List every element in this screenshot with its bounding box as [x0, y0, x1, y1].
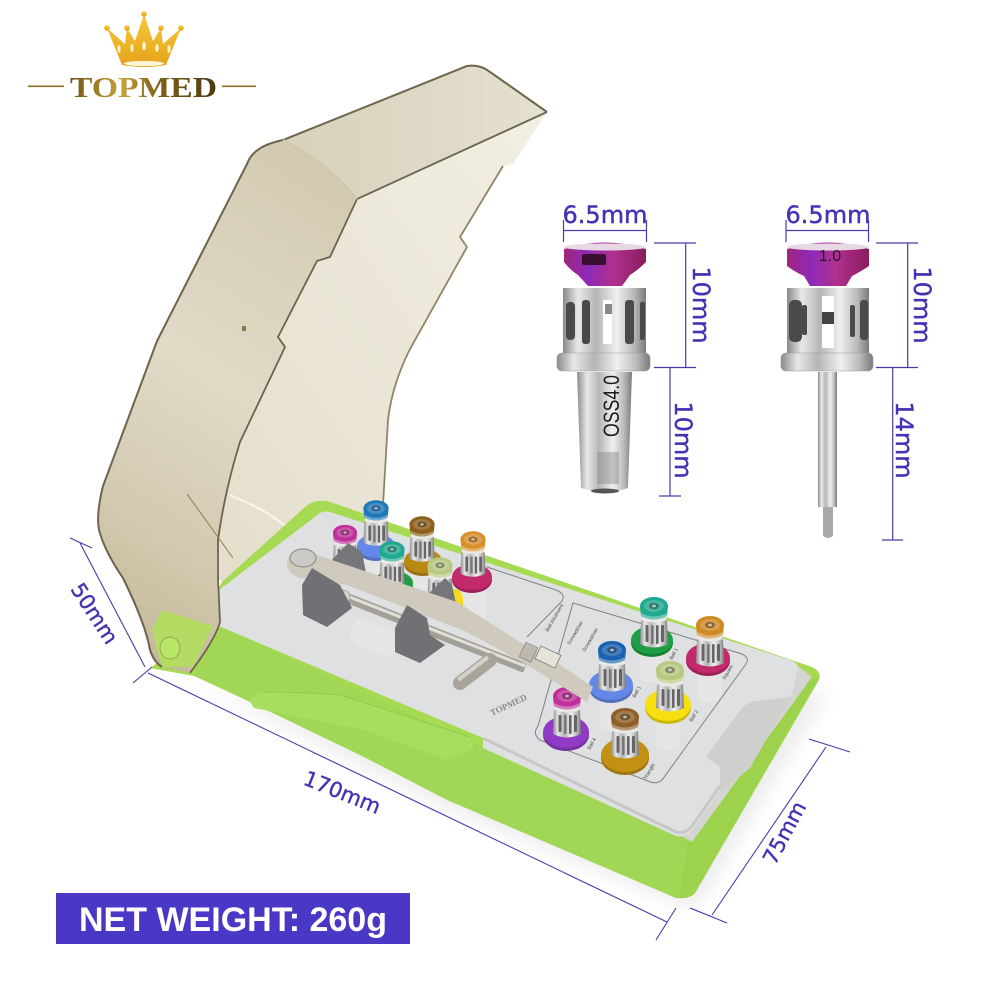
engraved text: 1.0 — [819, 248, 841, 265]
net weight banner — [56, 893, 410, 944]
green tray box — [150, 501, 820, 898]
plate labels: Ball 4 — [587, 737, 598, 751]
label: top width left: 6.5mm — [563, 201, 647, 229]
driver: 1.0 — [781, 242, 873, 538]
holders front — [302, 568, 445, 663]
tray front wall — [194, 627, 695, 898]
driver: OSS4.0 — [557, 242, 650, 494]
plate labels: Square — [722, 664, 735, 681]
plate TOPMED mark: TOPMED — [489, 692, 529, 718]
drivers in tray — [333, 500, 724, 758]
T handle — [460, 660, 490, 683]
label: 75mm: 75mm — [758, 797, 811, 868]
ring washers — [357, 534, 730, 775]
label: top width right: 6.5mm — [786, 201, 870, 229]
dimension lines — [70, 538, 850, 940]
instrument plate — [194, 512, 812, 842]
plate labels: Screwdriver — [582, 627, 600, 653]
icon: gold crown — [104, 11, 184, 67]
holders back — [330, 543, 458, 613]
logo wordmark: TOPMED — [70, 73, 217, 104]
hinge — [152, 610, 213, 667]
rod — [347, 598, 525, 668]
driver dimensions — [564, 220, 918, 540]
soft shadow under box — [190, 680, 830, 905]
plate labels: Ball Abutment — [545, 603, 565, 633]
plate labels: Ball 1 — [669, 647, 680, 661]
cover top face — [283, 66, 547, 199]
label outlines — [487, 567, 563, 637]
plate labels: Ball 1 — [632, 685, 643, 699]
slider wedge — [249, 692, 474, 760]
label: 50mm: 50mm — [66, 579, 123, 648]
cover front panel — [98, 66, 547, 673]
torque wrench — [287, 548, 593, 702]
label: 10mm handle left: 10mm — [687, 266, 715, 344]
plate labels: Screwdriver — [567, 620, 585, 646]
label: 14mm shaft: 14mm — [890, 401, 918, 479]
label: 10mm shaft: 10mm — [669, 401, 697, 479]
cover back panel — [218, 112, 547, 590]
tray right wall — [680, 678, 819, 898]
plate labels — [545, 603, 735, 781]
cover edges — [98, 66, 547, 667]
logo: TOPMED — [28, 11, 256, 104]
label: 170mm: 170mm — [300, 766, 384, 819]
plate labels: Ball 2 — [689, 709, 700, 723]
net weight banner: NET WEIGHT: 260g — [79, 901, 387, 939]
plate labels: Triangle — [643, 762, 657, 781]
wrench body — [287, 548, 593, 702]
engraved text: OSS4.0 — [599, 375, 624, 437]
reflections — [347, 556, 722, 750]
label: 10mm handle right: 10mm — [908, 266, 936, 344]
tray top lip — [150, 501, 820, 898]
